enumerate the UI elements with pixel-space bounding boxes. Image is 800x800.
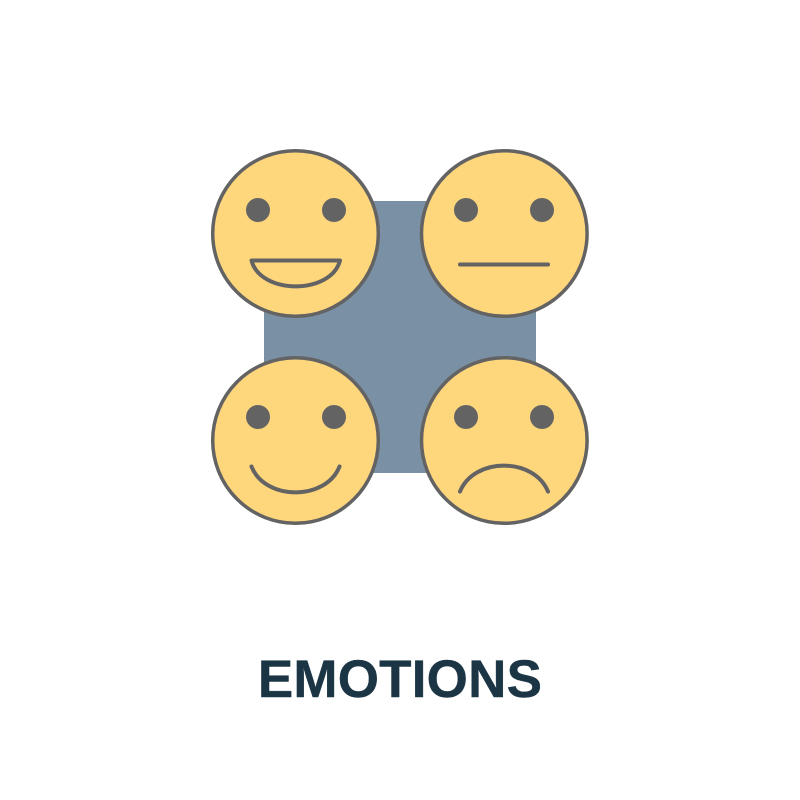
background square (264, 201, 536, 473)
icon: neutral face (422, 151, 587, 316)
icon: smiling face (213, 358, 378, 523)
icon: sad face (422, 358, 587, 523)
icon: laughing face (213, 151, 378, 316)
title: EMOTIONS (258, 650, 542, 709)
